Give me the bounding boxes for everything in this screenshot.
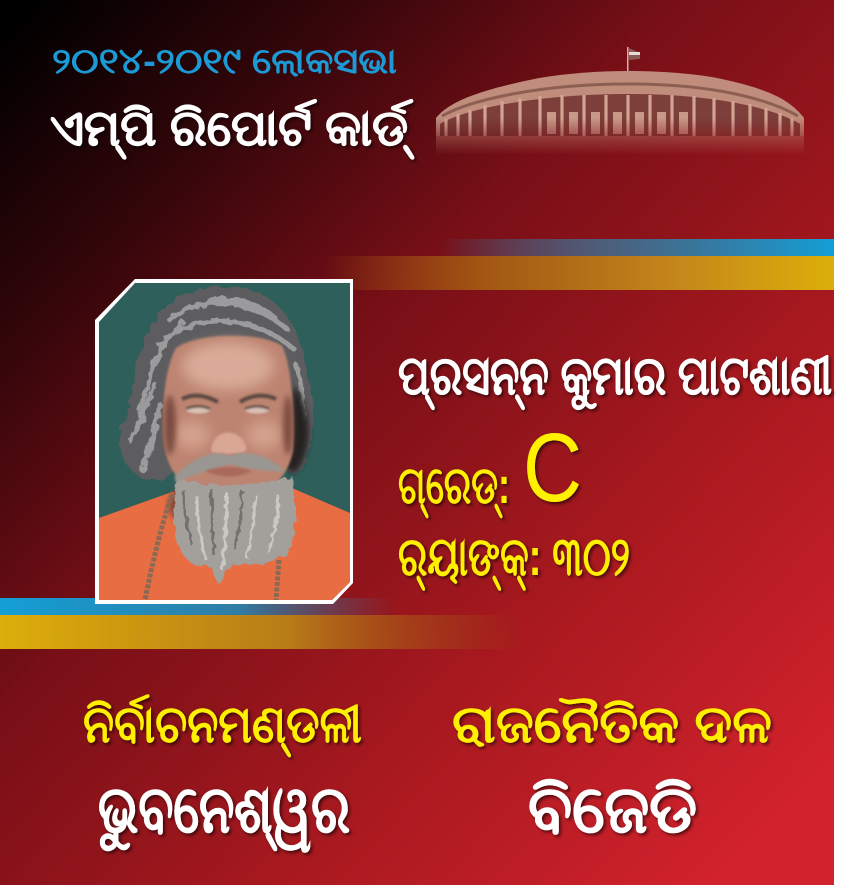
prayer beads bbox=[145, 494, 279, 600]
political party label: ରାଜନୈତିକ ଦଳ bbox=[452, 696, 772, 754]
top-right accent bars bbox=[325, 239, 834, 290]
heading: Lok Sabha term: ୨୦୧୪-୨୦୧୯ ଲୋକସଭା bbox=[52, 40, 397, 81]
hair mass bbox=[120, 287, 313, 481]
icon: parliament building bbox=[436, 47, 804, 154]
neck shadow bbox=[164, 487, 296, 522]
lower-left accent bars bbox=[0, 598, 525, 649]
rank: ର‍୍ୟାଙ୍କ୍: ୩୦୨ bbox=[398, 527, 630, 591]
forehead highlight bbox=[182, 342, 274, 390]
face side shading bbox=[164, 395, 293, 455]
beard strands bbox=[196, 492, 278, 570]
beard bbox=[174, 476, 295, 584]
constituency value: ଭୁବନେଶ୍ୱର bbox=[98, 772, 350, 854]
constituency label: ନିର୍ବାଚନମଣ୍ଡଳୀ bbox=[83, 694, 362, 757]
moustache bbox=[175, 453, 285, 482]
hair highlights bbox=[130, 299, 303, 470]
lips bbox=[205, 467, 252, 476]
dark hair shadow bbox=[282, 385, 309, 472]
nose bbox=[211, 432, 246, 454]
photo frame with portrait bbox=[95, 279, 355, 604]
grade value: C bbox=[523, 413, 582, 522]
title: MP report card: ଏମ୍‌ପି ରିପୋର୍ଟ କାର୍ଡ୍ bbox=[50, 99, 414, 160]
cheek highlights bbox=[174, 421, 282, 449]
brows and eyes bbox=[182, 396, 276, 414]
party value: ବିଜେଡି bbox=[528, 772, 697, 846]
beard dark strands bbox=[184, 490, 242, 555]
orange robe bbox=[99, 488, 350, 604]
grade label: ଗ୍ରେଡ୍: bbox=[398, 457, 510, 518]
face bbox=[163, 336, 294, 500]
